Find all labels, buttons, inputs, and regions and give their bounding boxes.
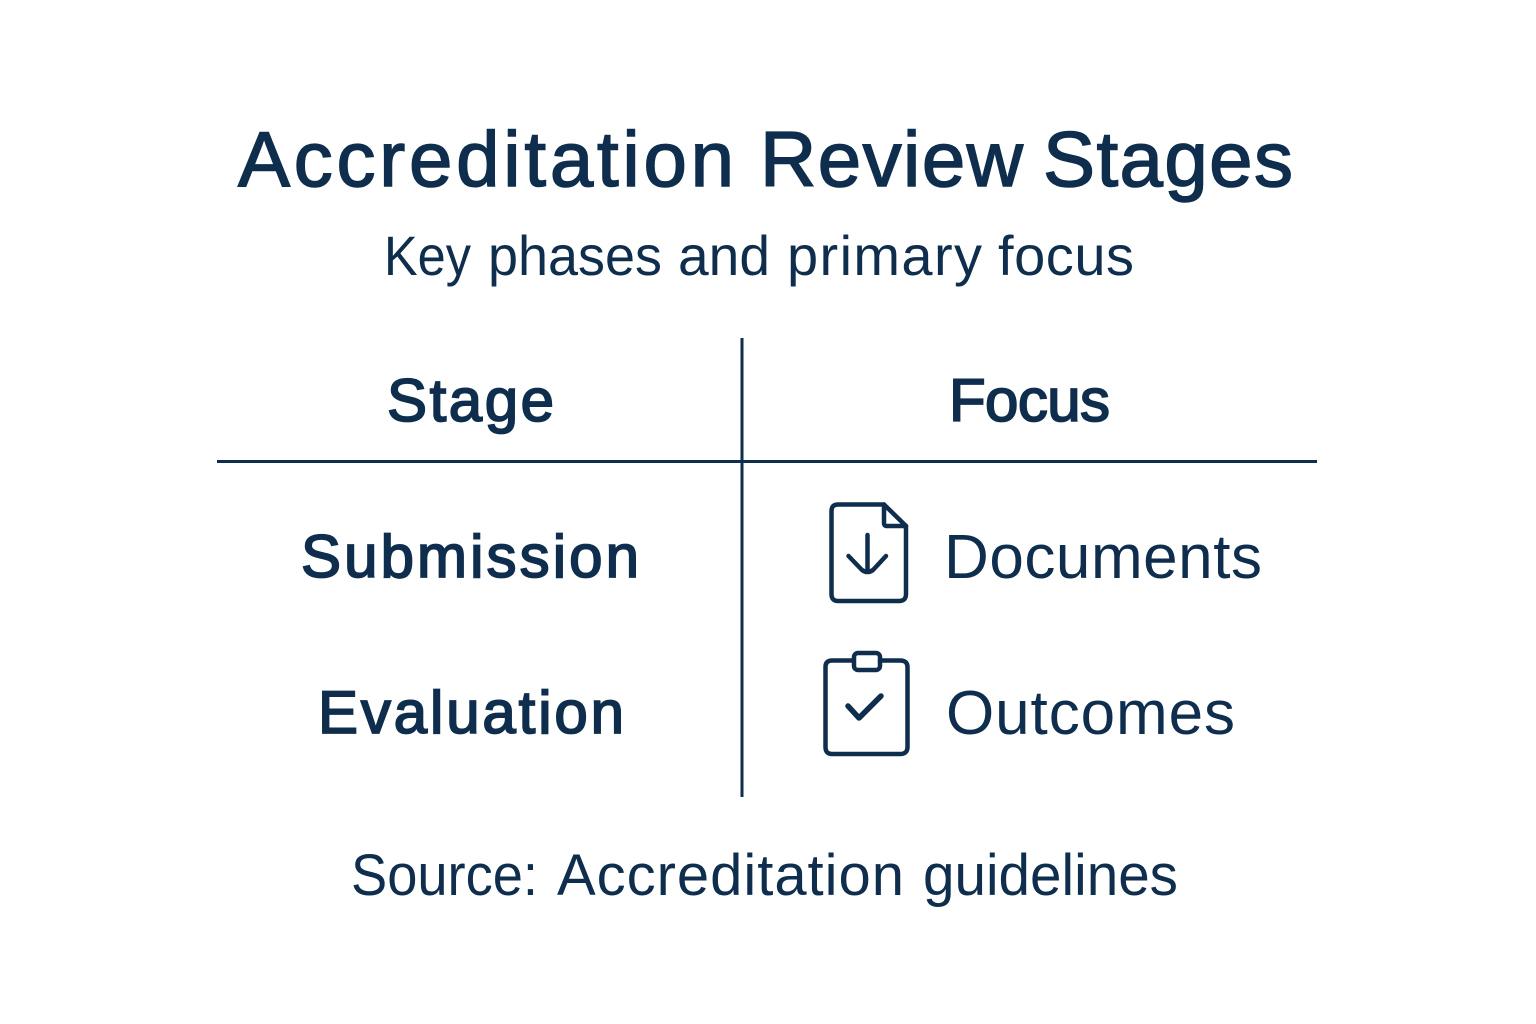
source note xyxy=(351,843,1178,908)
row label: Submission: Submission xyxy=(301,523,639,590)
focus label: Outcomes: Outcomes xyxy=(946,679,1235,748)
subtitle: and xyxy=(678,224,770,287)
column header: Stage: Stage xyxy=(387,367,554,434)
subtitle: primary xyxy=(787,224,982,287)
subtitle xyxy=(384,224,1134,287)
source note: guidelines xyxy=(923,843,1178,908)
vertical divider xyxy=(740,338,744,797)
subtitle: phases xyxy=(488,224,662,287)
title xyxy=(238,115,1293,203)
focus label: Documents: Documents xyxy=(944,523,1262,592)
source note: Source: xyxy=(351,843,538,908)
row label: Evaluation: Evaluation xyxy=(318,679,624,746)
title: Stages xyxy=(1043,115,1293,203)
subtitle: focus xyxy=(998,224,1134,287)
icon: document with down arrow xyxy=(832,504,906,601)
table xyxy=(217,338,1317,797)
header rule xyxy=(217,460,1317,463)
source note: Accreditation xyxy=(557,843,904,908)
title: Accreditation xyxy=(238,115,734,203)
icon: clipboard with check xyxy=(826,653,908,754)
title: Review xyxy=(760,115,1024,203)
column header: Focus: Focus xyxy=(949,367,1110,434)
subtitle: Key xyxy=(384,224,471,287)
